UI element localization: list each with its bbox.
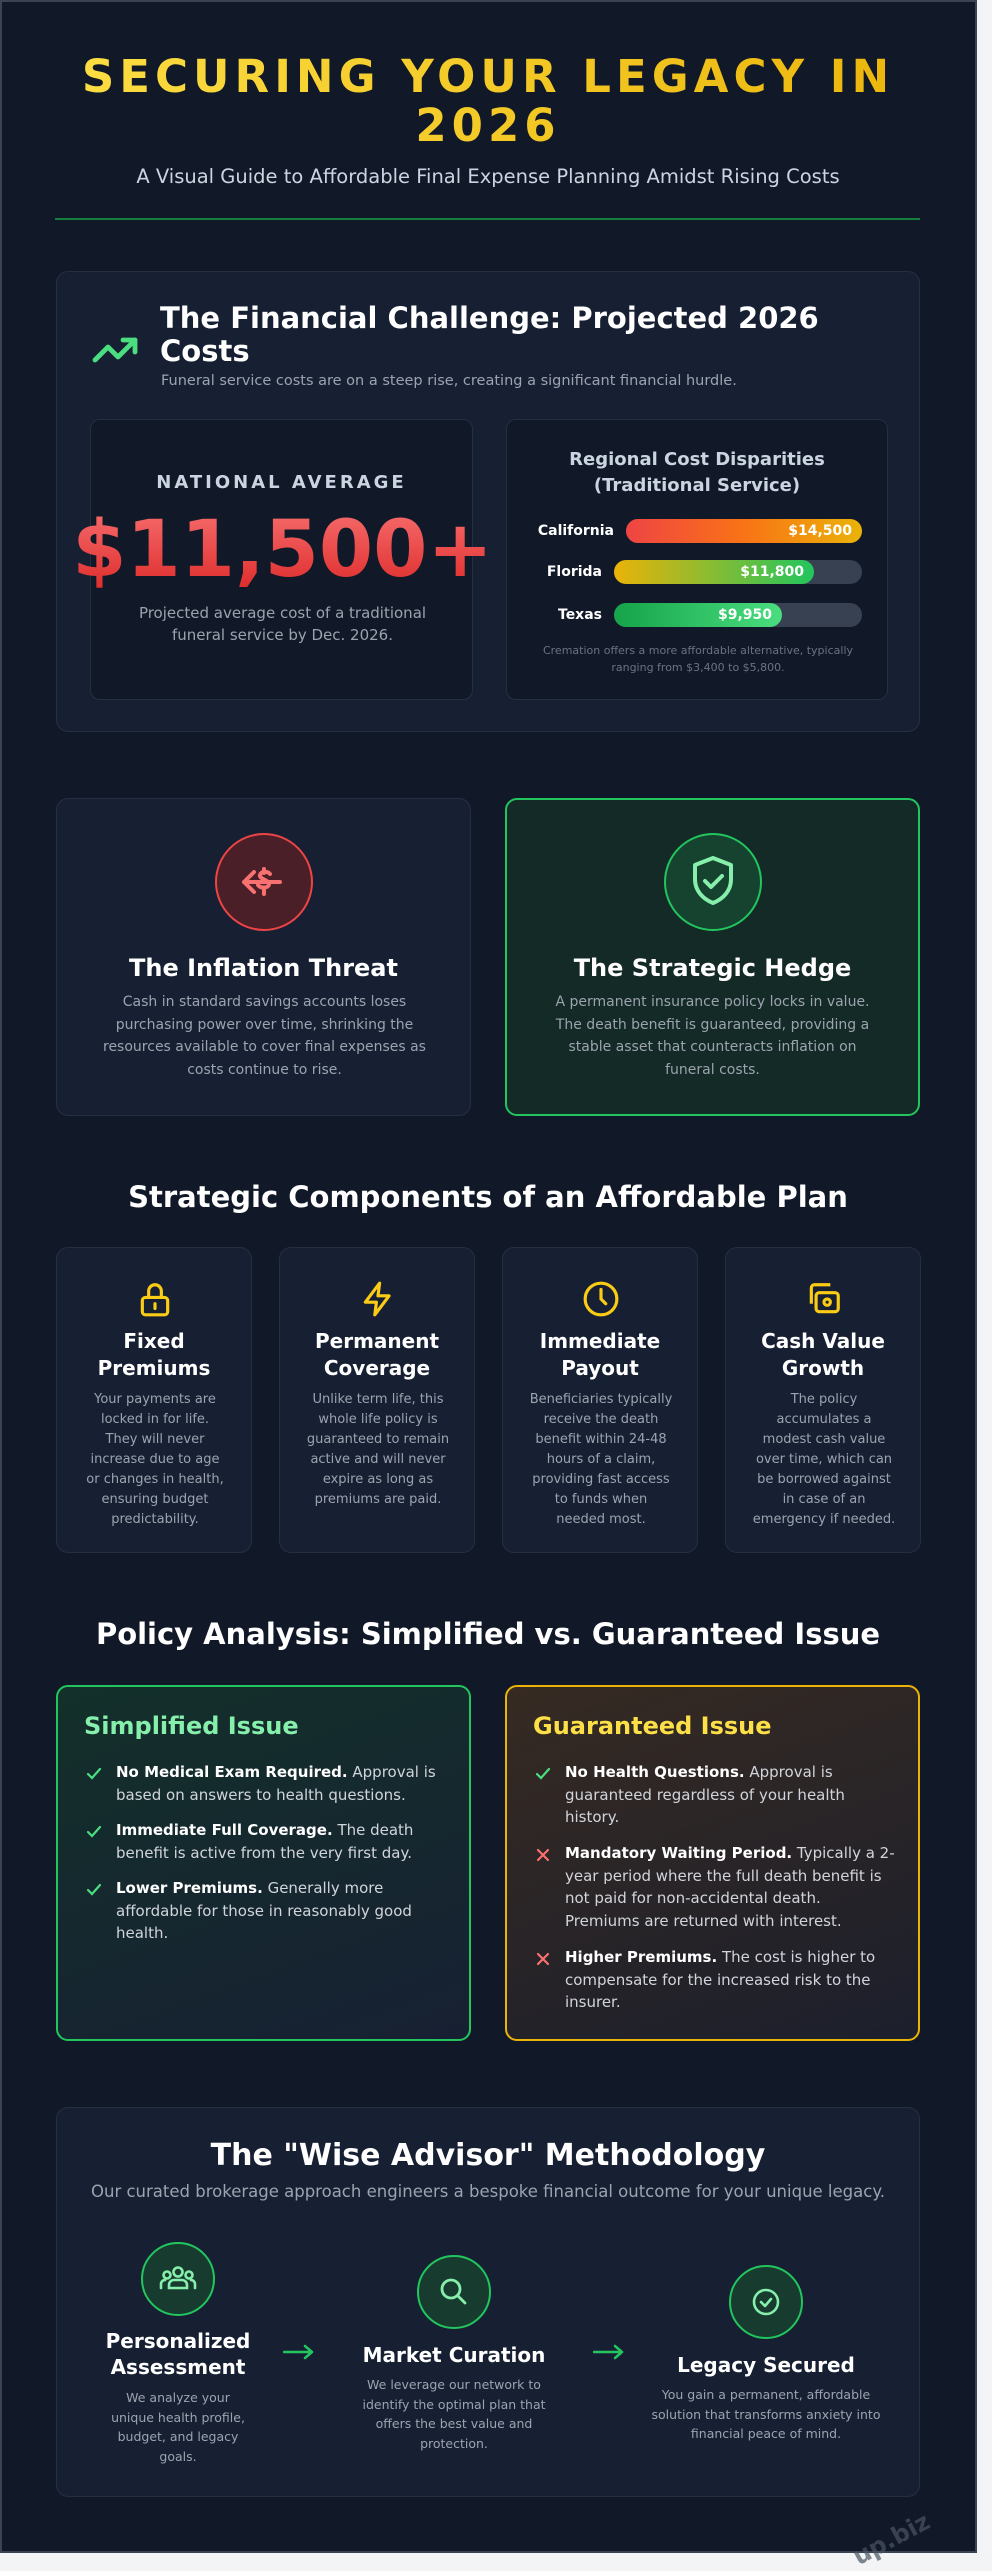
card: fixed premiums: Premiums [98,1356,210,1380]
step 3 [652,2265,880,2441]
panel: wise advisor methodology: The "Wise Advisor" Methodology [211,2138,765,2173]
step 2 [362,2255,546,2450]
icon: dollar arrow [215,833,313,931]
panel: strategic hedge: The Strategic Hedge [574,954,851,982]
card: national average: NATIONAL AVERAGE [156,472,407,493]
card: regional bar chart [506,419,888,700]
card: regional bar chart: $9,950 [718,607,772,623]
heading: policy analysis: Policy Analysis: Simplified vs. Guaranteed Issue [96,1617,880,1651]
icon: trending up [92,338,138,362]
step 2: Market Curation [363,2343,545,2367]
arrow [283,2344,314,2360]
card: national average: Projected average cost of a traditional funeral service by Dec. 2026. [139,604,426,644]
card: permanent coverage: Coverage [324,1356,430,1380]
panel: simplified issue: Immediate Full Coverage. The death benefit is active from the very first day. [116,1821,413,1862]
icon: shield [664,833,762,931]
panel: simplified issue: Simplified Issue [84,1712,299,1740]
card: regional bar chart: Texas [558,607,602,623]
panel: guaranteed issue: Mandatory Waiting Period. Typically a 2-year period where the full death benefit is not paid for non-accidental death. Premiums are returned with interest. [565,1844,895,1930]
panel: simplified issue: Lower Premiums. Generally more affordable for those in reasonably good health. [116,1879,412,1942]
panel: guaranteed issue [505,1685,920,2041]
panel: wise advisor methodology [56,2107,920,2497]
card: immediate payout [502,1247,698,1553]
subheading: Funeral service costs are on a steep rise, creating a significant financial hurdle. [161,373,737,389]
panel: financial challenge [56,271,920,732]
card: regional bar chart: $14,500 [788,523,852,539]
panel: simplified issue: No Medical Exam Required. Approval is based on answers to health questions. [116,1763,436,1804]
card: national average [90,419,473,700]
card: immediate payout: Beneficiaries typically receive the death benefit within 24-48 hours of a claim, providing fast access to funds when needed most. [530,1392,672,1527]
panel: guaranteed issue: Guaranteed Issue [533,1712,772,1740]
panel: simplified issue [56,1685,471,2041]
step 3: Legacy Secured [677,2353,855,2377]
step 3: You gain a permanent, affordable solution that transforms anxiety into financial peace of mind. [652,2387,880,2441]
subtitle: A Visual Guide to Affordable Final Expense Planning Amidst Rising Costs [136,165,840,188]
card: permanent coverage [279,1247,475,1553]
card: fixed premiums [56,1247,252,1553]
card: immediate payout: Payout [561,1356,639,1380]
card: immediate payout: Immediate [540,1329,660,1353]
card: cash value growth: Growth [782,1356,864,1380]
panel: inflation threat: Cash in standard savings accounts loses purchasing power over time, shrinking the resources available to cover final expenses as costs continue to rise. [103,994,426,1078]
card: fixed premiums: Your payments are locked in for life. They will never increase due to age or changes in health, ensuring budget predictability. [86,1392,224,1527]
panel: wise advisor methodology: Our curated brokerage approach engineers a bespoke financial outcome for your unique legacy. [91,2182,885,2201]
card: regional bar chart: Cremation offers a more affordable alternative, typically ranging from $3,400 to $5,800. [543,644,853,674]
step 2: We leverage our network to identify the optimal plan that offers the best value and protection. [362,2377,546,2450]
panel: inflation threat [56,798,471,1116]
card: cash value growth [725,1247,921,1553]
heading: The Financial Challenge: Projected 2026 Costs [160,301,819,368]
title: 2026 [415,99,561,152]
panel: strategic hedge: A permanent insurance policy locks in value. The death benefit is guaranteed, providing a stable asset that counteracts inflation on funeral costs. [555,994,870,1078]
panel: inflation threat: The Inflation Threat [129,954,398,982]
card: regional bar chart: Regional Cost Disparities [569,449,825,470]
watermark: up.biz [848,2507,934,2571]
step 1 [106,2242,250,2464]
panel: guaranteed issue: No Health Questions. Approval is guaranteed regardless of your health history. [565,1763,845,1826]
step 1: We analyze your unique health profile, budget, and legacy goals. [111,2390,245,2464]
card: permanent coverage: Unlike term life, this whole life policy is guaranteed to remain active and will never expire as long as premiums are paid. [307,1392,449,1507]
step 1: Assessment [111,2355,245,2379]
card: cash value growth: Cash Value [761,1329,885,1353]
step 1: Personalized [106,2329,250,2353]
big number: $11,500+ [72,505,493,595]
panel: strategic hedge [505,798,920,1116]
card: regional bar chart: $11,800 [740,564,804,580]
arrow [593,2344,624,2360]
card: fixed premiums: Fixed [123,1329,185,1353]
heading: strategic components: Strategic Components of an Affordable Plan [128,1180,848,1214]
card: regional bar chart: Florida [547,564,602,580]
card: regional bar chart: California [538,523,614,539]
card: permanent coverage: Permanent [315,1329,439,1353]
title [0,52,976,150]
title: SECURING YOUR LEGACY IN [82,50,894,103]
card: regional bar chart: (Traditional Service) [594,475,800,496]
panel: guaranteed issue: Higher Premiums. The cost is higher to compensate for the increased risk to the insurer. [565,1948,875,2011]
card: cash value growth: The policy accumulates a modest cash value over time, which can be borrowed against in case of an emergency if needed. [753,1392,895,1527]
